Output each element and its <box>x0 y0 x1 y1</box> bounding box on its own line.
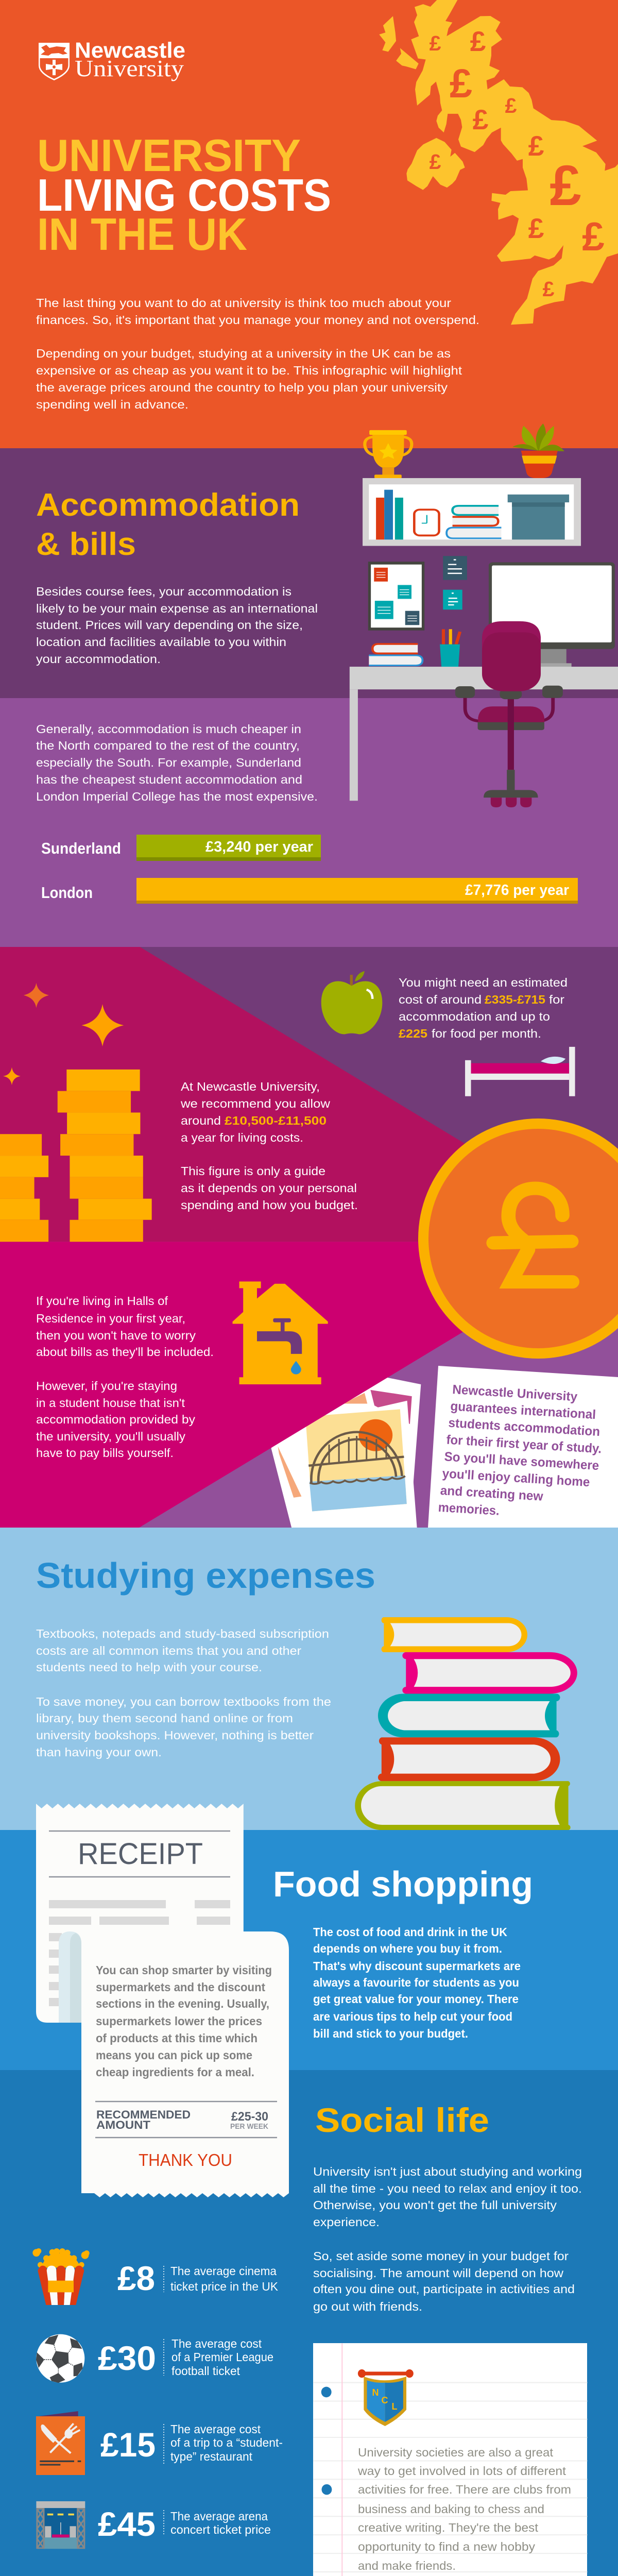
text block: north versus south: London Imperial College has the most expensive. <box>36 790 318 803</box>
icon: large pound coin <box>418 1118 618 1359</box>
text block: course fees: your accommodation. <box>36 652 161 666</box>
panel: living costs <box>0 947 618 1529</box>
text block: north versus south: especially the South. For example, Sunderland <box>36 756 301 769</box>
text block: introduction: expensive or as cheap as you want it to be. This infographic will highlight <box>36 364 462 377</box>
text block: food costs: That's why discount supermarkets are <box>313 1959 521 1973</box>
stat: football ticket: football ticket <box>171 2364 240 2378</box>
icon: UK map with pound signs: £ <box>470 25 486 57</box>
icon: UK map with pound signs: £ <box>528 130 544 162</box>
stat: restaurant trip: type” restaurant <box>170 2450 252 2463</box>
callout: guaranteed accommodation note: students accommodation <box>448 1416 600 1439</box>
noticeboard <box>368 562 424 631</box>
icon: stars <box>3 983 124 1085</box>
text block: monthly cost: for food per month. <box>432 1027 541 1040</box>
icon: society shield: L <box>391 2401 398 2412</box>
text block: recommended yearly budget: around <box>181 1114 221 1127</box>
text block: bills: Residence in your first year, <box>36 1312 185 1325</box>
text block: monthly cost: £225 <box>399 1027 427 1040</box>
icon: bed <box>465 1047 575 1096</box>
panel: introduction <box>36 0 618 411</box>
text block: societies: University societies are also a great <box>358 2446 553 2459</box>
icon: menu <box>36 2411 85 2475</box>
title <box>37 130 331 260</box>
icon: UK map with pound signs: £ <box>450 60 472 106</box>
text block: study costs: costs are all common items that you and other <box>36 1644 301 1657</box>
text block: north versus south: Generally, accommodation is much cheaper in <box>36 722 301 736</box>
logo: Newcastle University <box>39 38 185 81</box>
bar: London <box>41 878 578 904</box>
text block: shop smarter: sections in the evening. Usually, <box>96 1997 269 2010</box>
callout: guaranteed accommodation note: So you'll have somewhere <box>444 1449 599 1473</box>
title: IN THE UK <box>37 209 247 260</box>
icon: UK map with pound signs: £ <box>550 154 581 217</box>
text block: social life: go out with friends. <box>313 2300 422 2313</box>
icon: UK map with pound signs: £ <box>473 104 489 135</box>
text block: bills: However, if you're staying <box>36 1379 177 1393</box>
heading: studying expenses: Studying expenses <box>36 1555 375 1596</box>
stat: football ticket: of a Premier League <box>171 2350 273 2364</box>
panel: accommodation and bills <box>36 423 618 904</box>
icon: popcorn <box>32 2248 90 2305</box>
text block: shop smarter: means you can pick up some <box>96 2048 252 2062</box>
bar: London: £7,776 per year <box>465 882 569 899</box>
text block: shop smarter: supermarkets lower the prices <box>96 2014 262 2028</box>
icon: UK map with pound signs: £ <box>505 94 517 117</box>
text block: course fees: location and facilities available to you within <box>36 635 286 649</box>
icon: stacks of coins <box>0 1070 152 1242</box>
text block: social life: often you dine out, participate in activities and <box>313 2282 575 2296</box>
icon: society shield: N <box>372 2387 379 2398</box>
receipt: THANK YOU <box>139 2150 232 2170</box>
stat: football ticket: £30 <box>98 2339 156 2377</box>
icon: football <box>36 2334 84 2383</box>
shelf <box>363 478 581 546</box>
heading: accommodation and bills: Accommodation <box>36 487 300 523</box>
heading: accommodation and bills <box>36 487 300 562</box>
text block: shop smarter: You can shop smarter by visiting <box>96 1963 272 1977</box>
text block: social life: So, set aside some money in your budget for <box>313 2249 569 2263</box>
panel: studying expenses <box>0 1528 618 1830</box>
recommended amount <box>96 2108 268 2131</box>
icon: trophy <box>365 430 411 479</box>
text block: north versus south <box>36 722 318 803</box>
text block: food costs: The cost of food and drink in the UK <box>313 1925 507 1939</box>
text block: food costs: always a favourite for students as you <box>313 1976 519 1989</box>
stat: restaurant trip <box>36 2411 283 2475</box>
icon: society shield: C <box>381 2395 388 2405</box>
text block: north versus south: has the cheapest student accommodation and <box>36 773 302 786</box>
stat: football ticket: The average cost <box>171 2337 262 2350</box>
text block: societies: business and baking to chess and <box>358 2502 544 2516</box>
stat: restaurant trip: £15 <box>100 2426 156 2464</box>
text block: study costs: To save money, you can borrow textbooks from the <box>36 1695 331 1708</box>
stat: arena concert <box>36 2501 271 2549</box>
icon: UK map with pound signs: £ <box>528 212 544 244</box>
panel: social life <box>32 2101 587 2576</box>
text block: recommended yearly budget: £10,500-£11,500 <box>225 1114 327 1127</box>
stat: arena concert: £45 <box>98 2505 156 2543</box>
desk <box>350 667 618 801</box>
text block: course fees: student. Prices will vary depending on the size, <box>36 618 303 632</box>
text block: monthly cost: You might need an estimated <box>399 976 568 989</box>
text block: monthly cost <box>399 976 568 1040</box>
callout: guaranteed accommodation note: you'll enjoy calling home <box>442 1466 590 1489</box>
stat: football ticket <box>36 2334 273 2383</box>
stat: restaurant trip: of a trip to a “student- <box>170 2436 283 2449</box>
icon: UK map with pound signs: £ <box>582 214 605 259</box>
text block: bills: accommodation provided by <box>36 1413 195 1426</box>
wall notes <box>443 556 467 609</box>
text block: societies <box>357 2446 571 2572</box>
text block: food costs: are various tips to help cut your food <box>313 2010 512 2023</box>
text block: study costs: students need to help with your course. <box>36 1660 262 1674</box>
notebook: university societies <box>313 2343 587 2576</box>
text block: social life: socialising. The amount will depend on how <box>313 2266 564 2280</box>
text block: societies: activities for free. There are clubs from <box>358 2483 571 2496</box>
bar chart: accommodation cost <box>41 835 578 904</box>
text block: food costs: depends on where you buy it from. <box>313 1942 502 1955</box>
text block: social life <box>313 2165 582 2313</box>
text block: monthly cost: accommodation and up to <box>399 1010 550 1023</box>
receipt <box>36 1804 289 2197</box>
icon: UK map with pound signs: £ <box>430 150 441 174</box>
background shapes top <box>0 947 618 1242</box>
logo: Newcastle University: Newcastle <box>75 38 185 63</box>
recommended amount: RECOMMENDED <box>96 2108 191 2121</box>
bar: Sunderland <box>41 835 321 861</box>
text block: bills: If you're living in Halls of <box>36 1294 168 1308</box>
icon: society shield <box>358 2369 414 2426</box>
logo: Newcastle University: University <box>75 55 184 81</box>
text block: food costs <box>313 1925 521 2040</box>
text block: recommended yearly budget: we recommend you allow <box>180 1097 331 1110</box>
title: UNIVERSITY <box>37 130 301 181</box>
text block: study costs: Textbooks, notepads and study-based subscription <box>36 1627 329 1640</box>
text block: course fees <box>36 585 318 666</box>
icon: stage <box>36 2501 85 2549</box>
icon: apple <box>321 971 382 1034</box>
desk books <box>369 644 422 666</box>
text block: monthly cost: cost of around <box>399 993 482 1006</box>
text block: introduction: Depending on your budget, studying at a university in the UK can be as <box>36 347 451 360</box>
text block: introduction: The last thing you want to do at university is think too much about your <box>36 296 451 310</box>
heading: food shopping: Food shopping <box>273 1864 533 1904</box>
stat: cinema ticket <box>32 2248 278 2305</box>
text block: shop smarter: of products at this time which <box>96 2031 258 2045</box>
text block: shop smarter: supermarkets and the discount <box>96 1980 265 1994</box>
heading: accommodation and bills: & bills <box>36 527 136 562</box>
text block: introduction: spending well in advance. <box>36 398 188 411</box>
text block: recommended yearly budget: a year for living costs. <box>181 1131 303 1144</box>
callout: guaranteed accommodation note: Newcastle University <box>452 1382 578 1404</box>
stat: restaurant trip: The average cost <box>170 2422 261 2436</box>
callout: guaranteed accommodation note: memories. <box>438 1500 500 1518</box>
text block: study costs: library, buy them second hand online or from <box>36 1711 293 1725</box>
stat: arena concert: The average arena <box>170 2510 268 2523</box>
text block: introduction <box>36 296 479 411</box>
text block: study costs <box>36 1627 331 1759</box>
text block: social life: all the time - you need to relax and enjoy it too. <box>313 2182 582 2195</box>
text block: social life: University isn't just about studying and working <box>313 2165 582 2178</box>
text block: shop smarter <box>96 1963 272 2079</box>
bar: Sunderland: Sunderland <box>41 839 121 857</box>
text block: bills: in a student house that isn't <box>36 1396 185 1410</box>
text block: introduction: finances. So, it's important that you manage your money and not overspend. <box>36 313 479 327</box>
text block: recommended yearly budget: This figure is only a guide <box>181 1164 325 1178</box>
text block: monthly cost: £335-£715 <box>485 993 545 1006</box>
panel: food shopping <box>0 1804 618 2576</box>
callout: guaranteed accommodation note: and creating new <box>440 1483 544 1504</box>
text block: social life: Otherwise, you won't get the full university <box>313 2198 557 2212</box>
recommended amount: £25-30 <box>231 2110 268 2124</box>
text block: introduction: the average prices around the country to help you plan your university <box>36 381 448 394</box>
text block: societies: creative writing. They're the best <box>358 2521 538 2534</box>
receipt: RECEIPT <box>78 1837 203 1871</box>
text block: societies: opportunity to find a new hobby <box>358 2540 535 2553</box>
text block: societies: and make friends. <box>358 2559 456 2572</box>
recommended amount: PER WEEK <box>230 2122 268 2131</box>
illustration: desk and shelf <box>350 423 618 807</box>
title: LIVING COSTS <box>37 170 331 221</box>
text block: course fees: Besides course fees, your accommodation is <box>36 585 291 598</box>
section backgrounds <box>0 0 618 1528</box>
callout: guaranteed accommodation note: guarantees international <box>450 1399 596 1422</box>
text block: recommended yearly budget: At Newcastle University, <box>181 1080 320 1093</box>
text block: social life: experience. <box>313 2215 380 2229</box>
stat: arena concert: concert ticket price <box>170 2523 271 2536</box>
chair <box>455 621 563 807</box>
icon: plant pot <box>512 423 564 479</box>
text block: north versus south: the North compared to the rest of the country, <box>36 739 300 752</box>
text block: food costs: bill and stick to your budget. <box>313 2027 468 2040</box>
illustration: photographs <box>271 1365 421 1528</box>
text block: food costs: get great value for your money. There <box>313 1992 519 2006</box>
stat: cinema ticket: £8 <box>117 2259 155 2297</box>
text block: bills: then you won't have to worry <box>36 1329 196 1342</box>
icon: stack of books <box>355 1617 577 1830</box>
icon: UK map with pound signs <box>379 0 618 325</box>
text block: bills: about bills as they'll be included. <box>36 1345 214 1359</box>
recommended amount: AMOUNT <box>96 2119 151 2131</box>
text block: recommended yearly budget: spending and how you budget. <box>181 1198 358 1212</box>
callout: guaranteed accommodation note: for their first year of study. <box>446 1433 602 1456</box>
text block: monthly cost: for <box>549 993 564 1006</box>
background shape: magenta <box>0 1242 618 1529</box>
icon: UK map with pound signs: £ <box>430 31 441 55</box>
text block: shop smarter: cheap ingredients for a meal. <box>96 2065 254 2079</box>
bar: London: London <box>41 884 93 902</box>
icon: house with tap <box>233 1281 328 1384</box>
text block: recommended yearly budget: as it depends on your personal <box>181 1181 357 1195</box>
stat: cinema ticket: The average cinema <box>170 2264 277 2278</box>
icon: UK map with pound signs: £ <box>543 277 555 301</box>
computer monitor <box>489 562 615 667</box>
heading: social life: Social life <box>315 2101 489 2139</box>
bar: Sunderland: £3,240 per year <box>205 839 313 855</box>
stat: cinema ticket: ticket price in the UK <box>170 2280 278 2293</box>
text block: study costs: university bookshops. However, nothing is better <box>36 1728 314 1742</box>
callout: guaranteed accommodation note <box>428 1366 618 1528</box>
pen cup <box>440 629 460 667</box>
text block: course fees: likely to be your main expense as an international <box>36 602 318 615</box>
text block: bills: the university, you'll usually <box>36 1430 185 1443</box>
text block: bills <box>36 1294 214 1460</box>
text block: societies: way to get involved in lots of different <box>357 2464 566 2478</box>
text block: study costs: than having your own. <box>36 1745 162 1759</box>
text block: recommended yearly budget <box>180 1080 358 1212</box>
text block: bills: have to pay bills yourself. <box>36 1446 174 1460</box>
